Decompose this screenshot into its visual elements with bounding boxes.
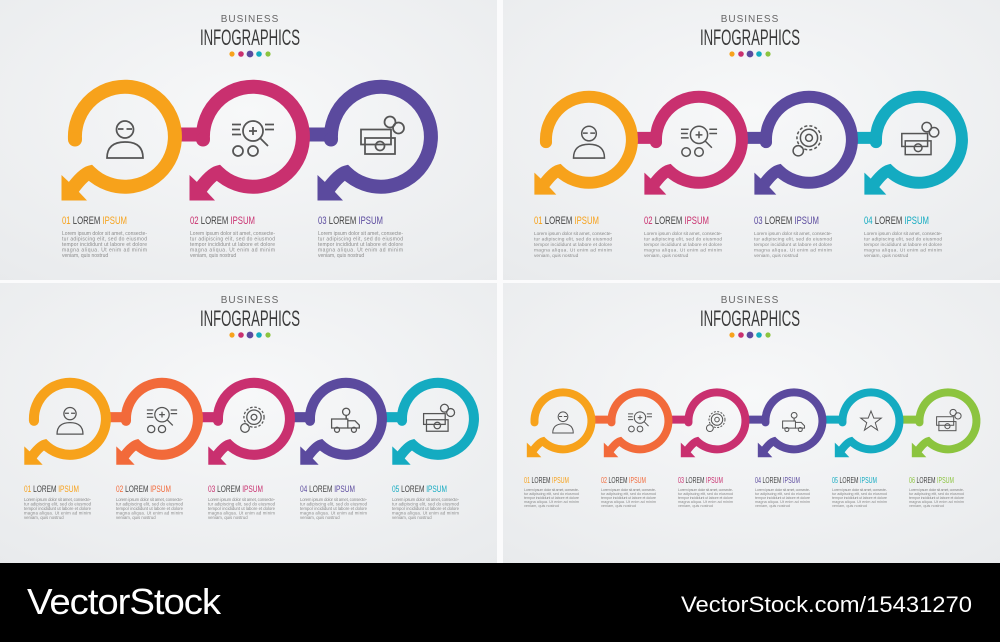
- step texts: tur adipiscing elit, sed do eiusmod: [190, 236, 275, 242]
- step texts: tur adipiscing elit, sed do eiusmod: [300, 502, 368, 506]
- step texts: Lorem ipsum dolor sit amet, consecte-: [909, 488, 965, 492]
- heading: INFOGRAPHICS: [700, 306, 800, 331]
- step texts: Lorem ipsum dolor sit amet, consecte-: [116, 497, 184, 502]
- step texts: tempor incididunt ut labore et dolore: [300, 506, 368, 511]
- step texts: tempor incididunt ut labore et dolore: [864, 242, 942, 248]
- step texts: veniam, quis nostrud: [755, 504, 790, 508]
- step texts: magna aliqua. Ut enim ad minim: [864, 248, 942, 254]
- step texts: magna aliqua. Ut enim ad minim: [62, 248, 147, 254]
- step texts: veniam, quis nostrud: [754, 253, 799, 259]
- heading: [700, 14, 800, 57]
- heading: [200, 295, 300, 338]
- footer bar: [0, 563, 1000, 642]
- step texts: tur adipiscing elit, sed do eiusmod: [601, 492, 656, 496]
- step texts: tur adipiscing elit, sed do eiusmod: [755, 492, 810, 496]
- step texts: Lorem ipsum dolor sit amet, consecte-: [300, 497, 368, 502]
- step texts: 01 LOREM IPSUM: [62, 215, 127, 227]
- step texts: magna aliqua. Ut enim ad minim: [832, 500, 887, 504]
- heading: BUSINESS: [221, 14, 279, 25]
- step texts: 03 LOREM IPSUM: [208, 484, 263, 495]
- panel: four steps: [534, 14, 962, 259]
- step texts: tempor incididunt ut labore et dolore: [601, 496, 656, 500]
- step texts: tur adipiscing elit, sed do eiusmod: [644, 236, 722, 242]
- step texts: magna aliqua. Ut enim ad minim: [24, 510, 91, 516]
- step texts: veniam, quis nostrud: [62, 253, 108, 259]
- step texts: 02 LOREM IPSUM: [601, 476, 646, 485]
- step texts: 04 LOREM IPSUM: [300, 484, 355, 495]
- step texts: 06 LOREM IPSUM: [909, 476, 954, 485]
- step texts: magna aliqua. Ut enim ad minim: [190, 248, 275, 254]
- step texts: 01 LOREM IPSUM: [24, 484, 79, 495]
- step texts: tempor incididunt ut labore et dolore: [754, 242, 832, 248]
- step texts: veniam, quis nostrud: [909, 504, 944, 508]
- step texts: Lorem ipsum dolor sit amet, consecte-: [190, 231, 275, 237]
- step texts: tur adipiscing elit, sed do eiusmod: [832, 492, 887, 496]
- step texts: [524, 476, 965, 508]
- step texts: magna aliqua. Ut enim ad minim: [601, 500, 656, 504]
- heading: BUSINESS: [221, 295, 279, 306]
- step texts: Lorem ipsum dolor sit amet, consecte-: [208, 497, 276, 502]
- step texts: tempor incididunt ut labore et dolore: [62, 242, 147, 248]
- step texts: Lorem ipsum dolor sit amet, consecte-: [755, 488, 811, 492]
- step texts: veniam, quis nostrud: [208, 515, 248, 520]
- step texts: Lorem ipsum dolor sit amet, consecte-: [678, 488, 734, 492]
- step texts: magna aliqua. Ut enim ad minim: [644, 248, 722, 254]
- panel: six steps: [524, 295, 976, 508]
- step texts: Lorem ipsum dolor sit amet, consecte-: [644, 231, 722, 237]
- step texts: tempor incididunt ut labore et dolore: [318, 242, 403, 248]
- step texts: veniam, quis nostrud: [392, 515, 432, 520]
- step texts: tur adipiscing elit, sed do eiusmod: [392, 502, 460, 506]
- step texts: 02 LOREM IPSUM: [644, 215, 709, 227]
- step texts: 03 LOREM IPSUM: [678, 476, 723, 485]
- step texts: magna aliqua. Ut enim ad minim: [318, 248, 403, 254]
- step texts: tempor incididunt ut labore et dolore: [392, 506, 460, 511]
- step texts: magna aliqua. Ut enim ad minim: [754, 248, 832, 254]
- step texts: magna aliqua. Ut enim ad minim: [755, 500, 810, 504]
- step texts: veniam, quis nostrud: [190, 253, 236, 259]
- step texts: Lorem ipsum dolor sit amet, consecte-: [24, 497, 92, 502]
- step texts: 04 LOREM IPSUM: [864, 215, 929, 227]
- ring chain: [534, 97, 962, 195]
- step texts: magna aliqua. Ut enim ad minim: [208, 510, 275, 516]
- step texts: veniam, quis nostrud: [116, 515, 156, 520]
- heading: INFOGRAPHICS: [200, 25, 300, 50]
- step texts: Lorem ipsum dolor sit amet, consecte-: [534, 231, 612, 237]
- step texts: tempor incididunt ut labore et dolore: [116, 506, 184, 511]
- panel: three steps: [62, 14, 431, 259]
- step texts: tempor incididunt ut labore et dolore: [190, 242, 275, 248]
- step texts: magna aliqua. Ut enim ad minim: [116, 510, 183, 516]
- heading: BUSINESS: [721, 14, 779, 25]
- step texts: tur adipiscing elit, sed do eiusmod: [754, 236, 832, 242]
- step texts: Lorem ipsum dolor sit amet, consecte-: [754, 231, 832, 237]
- step texts: veniam, quis nostrud: [524, 504, 559, 508]
- heading: [700, 295, 800, 338]
- step texts: tur adipiscing elit, sed do eiusmod: [864, 236, 942, 242]
- step texts: veniam, quis nostrud: [24, 515, 64, 520]
- step texts: tempor incididunt ut labore et dolore: [24, 506, 92, 511]
- step texts: veniam, quis nostrud: [864, 253, 909, 259]
- step texts: 01 LOREM IPSUM: [524, 476, 569, 485]
- step texts: [24, 484, 460, 520]
- step texts: tur adipiscing elit, sed do eiusmod: [524, 492, 579, 496]
- step texts: tur adipiscing elit, sed do eiusmod: [534, 236, 612, 242]
- step texts: 04 LOREM IPSUM: [755, 476, 800, 485]
- step texts: [534, 215, 942, 259]
- step texts: tur adipiscing elit, sed do eiusmod: [116, 502, 184, 506]
- ring chain: [62, 87, 431, 200]
- step texts: tur adipiscing elit, sed do eiusmod: [318, 236, 403, 242]
- heading: BUSINESS: [721, 295, 779, 306]
- step texts: tempor incididunt ut labore et dolore: [534, 242, 612, 248]
- step texts: veniam, quis nostrud: [318, 253, 364, 259]
- step texts: veniam, quis nostrud: [300, 515, 340, 520]
- step texts: tur adipiscing elit, sed do eiusmod: [24, 502, 92, 506]
- step texts: tur adipiscing elit, sed do eiusmod: [909, 492, 964, 496]
- step texts: tempor incididunt ut labore et dolore: [208, 506, 276, 511]
- heading: INFOGRAPHICS: [200, 306, 300, 331]
- step texts: Lorem ipsum dolor sit amet, consecte-: [524, 488, 580, 492]
- step texts: [62, 215, 403, 259]
- step texts: magna aliqua. Ut enim ad minim: [678, 500, 733, 504]
- step texts: 02 LOREM IPSUM: [190, 215, 255, 227]
- step texts: 05 LOREM IPSUM: [392, 484, 447, 495]
- ring chain: [527, 392, 976, 457]
- step texts: 03 LOREM IPSUM: [318, 215, 383, 227]
- step texts: magna aliqua. Ut enim ad minim: [300, 510, 367, 516]
- heading: INFOGRAPHICS: [700, 25, 800, 50]
- step texts: magna aliqua. Ut enim ad minim: [524, 500, 579, 504]
- step texts: veniam, quis nostrud: [678, 504, 713, 508]
- step texts: tur adipiscing elit, sed do eiusmod: [62, 236, 147, 242]
- panel: five steps: [24, 295, 474, 520]
- step texts: tempor incididunt ut labore et dolore: [644, 242, 722, 248]
- step texts: tur adipiscing elit, sed do eiusmod: [208, 502, 276, 506]
- step texts: tempor incididunt ut labore et dolore: [755, 496, 810, 500]
- step texts: 01 LOREM IPSUM: [534, 215, 599, 227]
- step texts: magna aliqua. Ut enim ad minim: [909, 500, 964, 504]
- step texts: veniam, quis nostrud: [601, 504, 636, 508]
- heading: [200, 14, 300, 57]
- step texts: tempor incididunt ut labore et dolore: [909, 496, 964, 500]
- step texts: veniam, quis nostrud: [534, 253, 579, 259]
- step texts: veniam, quis nostrud: [832, 504, 867, 508]
- step texts: tempor incididunt ut labore et dolore: [678, 496, 733, 500]
- step texts: Lorem ipsum dolor sit amet, consecte-: [62, 231, 147, 237]
- step texts: veniam, quis nostrud: [644, 253, 689, 259]
- step texts: tempor incididunt ut labore et dolore: [524, 496, 579, 500]
- step texts: magna aliqua. Ut enim ad minim: [534, 248, 612, 254]
- step texts: magna aliqua. Ut enim ad minim: [392, 510, 459, 516]
- step texts: tur adipiscing elit, sed do eiusmod: [678, 492, 733, 496]
- step texts: Lorem ipsum dolor sit amet, consecte-: [318, 231, 403, 237]
- ring chain: [24, 383, 474, 465]
- footer bar: VectorStock: [27, 581, 222, 622]
- step texts: Lorem ipsum dolor sit amet, consecte-: [832, 488, 888, 492]
- step texts: 05 LOREM IPSUM: [832, 476, 877, 485]
- step texts: Lorem ipsum dolor sit amet, consecte-: [392, 497, 460, 502]
- step texts: Lorem ipsum dolor sit amet, consecte-: [601, 488, 657, 492]
- step texts: Lorem ipsum dolor sit amet, consecte-: [864, 231, 942, 237]
- step texts: tempor incididunt ut labore et dolore: [832, 496, 887, 500]
- step texts: 03 LOREM IPSUM: [754, 215, 819, 227]
- step texts: 02 LOREM IPSUM: [116, 484, 171, 495]
- footer bar: VectorStock.com/15431270: [681, 592, 972, 617]
